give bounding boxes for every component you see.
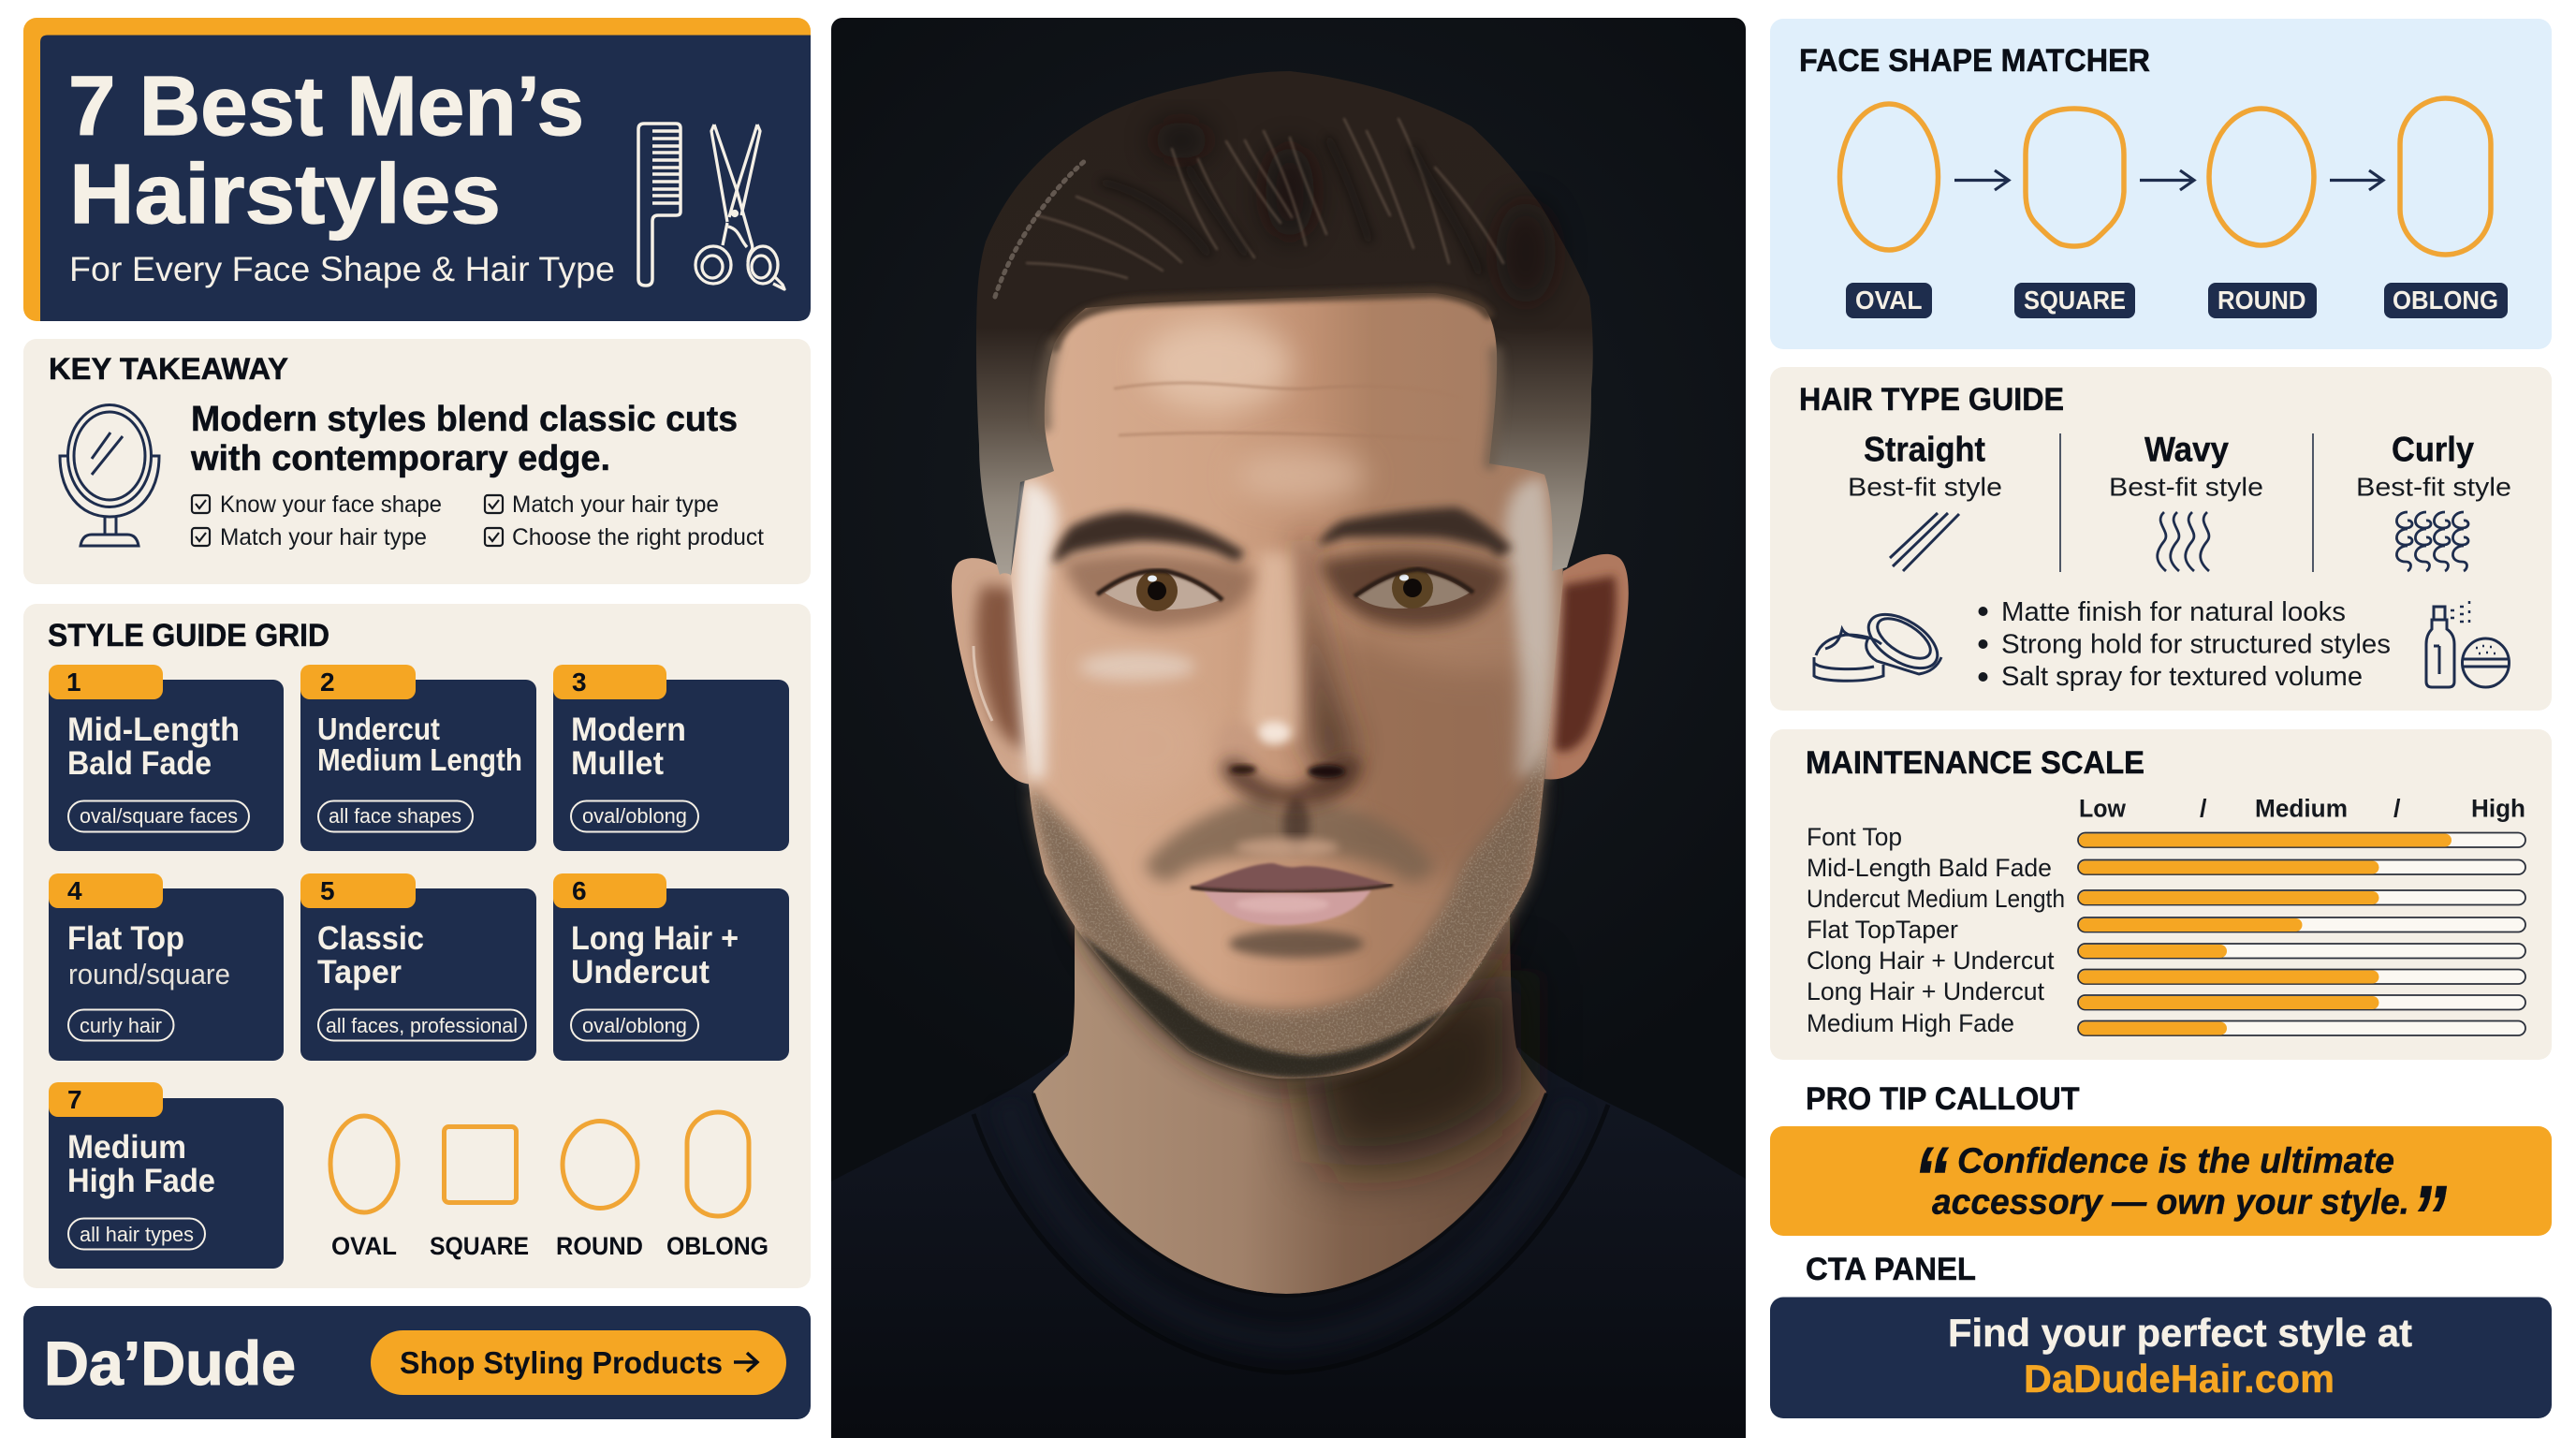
title — [68, 60, 584, 242]
panel: maintenance scale — [1770, 729, 2552, 1060]
checklist: Match your hair type — [220, 524, 427, 550]
style labels: Long Hair + Undercut — [1807, 977, 2044, 1005]
style labels: Font Top — [1807, 823, 1902, 851]
heading: hair type guide: HAIR TYPE GUIDE — [1799, 382, 2064, 418]
card 4 — [49, 873, 284, 1061]
scale labels — [2079, 794, 2525, 822]
key message: with contemporary edge. — [190, 439, 610, 478]
card 7 — [49, 1082, 284, 1269]
panel: title header — [23, 18, 811, 321]
icon: pomade jar — [1814, 604, 1946, 681]
icon: spray bottle and powder — [2426, 601, 2509, 687]
checklist: Choose the right product — [512, 524, 764, 550]
callout: pro tip quote: Confidence is the ultimate — [1957, 1142, 2394, 1181]
product tips list: Salt spray for textured volume — [2001, 662, 2363, 692]
arrows — [1954, 170, 2383, 190]
card 5: Classic — [317, 920, 424, 957]
shape labels: ROUND — [2217, 286, 2306, 315]
product tips list: Matte finish for natural looks — [2001, 597, 2346, 627]
product tips list — [1979, 597, 2391, 692]
hair shading and strands — [995, 119, 1556, 463]
scale labels: Low — [2079, 794, 2127, 822]
panel: hair type guide — [1770, 367, 2552, 711]
column: curly: Best-fit style — [2356, 472, 2511, 502]
column: wavy: Wavy — [2144, 431, 2229, 468]
column: wavy — [2109, 431, 2263, 571]
mouth — [1191, 838, 1393, 925]
card 4: Flat Top — [67, 920, 184, 957]
card 1: 1 — [66, 668, 81, 697]
card 3: Modern — [571, 712, 686, 748]
shape labels: SQUARE — [2024, 286, 2126, 315]
heading: maintenance scale: MAINTENANCE SCALE — [1806, 745, 2144, 781]
skin highlights and shadows — [1016, 320, 1555, 874]
card 1: Bald Fade — [67, 745, 212, 782]
card 4: curly hair — [80, 1014, 162, 1037]
style labels: Undercut Medium Length — [1807, 885, 2065, 913]
checklist: Know your face shape — [220, 492, 442, 518]
key message: Modern styles blend classic cuts — [191, 400, 738, 439]
heading: style guide grid: STYLE GUIDE GRID — [48, 618, 329, 653]
card 7: High Fade — [67, 1163, 215, 1199]
title: Hairstyles — [69, 148, 501, 242]
card 4: round/square — [68, 958, 230, 990]
scale labels: Medium — [2255, 794, 2348, 822]
face — [1011, 281, 1563, 1078]
nose — [1220, 757, 1362, 807]
photo: portrait of man — [831, 18, 1750, 1438]
column: curly — [2356, 431, 2511, 571]
callout: pro tip quote: “ — [1913, 1129, 1949, 1228]
scale labels: / — [2200, 794, 2207, 822]
ears — [952, 554, 1629, 785]
subtitle: For Every Face Shape & Hair Type — [69, 250, 615, 288]
panel: brand bar — [23, 1306, 811, 1419]
icon: mirror — [60, 404, 159, 546]
face shape outlines — [1840, 98, 2491, 255]
shape labels: OVAL — [1855, 286, 1923, 315]
panel: call to action — [1770, 1298, 2552, 1418]
callout: pro tip quote — [1770, 1126, 2552, 1267]
key message — [190, 400, 738, 478]
card 6: oval/oblong — [582, 1014, 687, 1037]
face shape icons: ROUND — [556, 1232, 643, 1260]
style labels: Clong Hair + Undercut — [1807, 946, 2055, 975]
card 7: all hair types — [80, 1223, 194, 1246]
style labels — [1807, 823, 2065, 1037]
hair — [976, 71, 1593, 575]
card 7: Medium — [67, 1129, 186, 1166]
card 6: Undercut — [571, 954, 710, 990]
card 6: Long Hair + — [571, 920, 739, 957]
card 5: all faces, professional — [326, 1014, 518, 1037]
eyebrows — [1052, 507, 1513, 564]
card 2: all face shapes — [329, 804, 461, 828]
column: wavy: Best-fit style — [2109, 472, 2263, 502]
shirt — [831, 1048, 1746, 1352]
card 1: Mid-Length — [67, 712, 240, 748]
column: straight — [1848, 431, 2002, 571]
column: curly: Curly — [2392, 431, 2474, 468]
heading: face shape matcher: FACE SHAPE MATCHER — [1799, 43, 2150, 79]
face shape icons: OBLONG — [666, 1232, 768, 1260]
neck — [1033, 899, 1546, 1296]
card 3 — [553, 665, 789, 851]
scale labels: High — [2471, 794, 2525, 822]
title: 7 Best Men’s — [68, 60, 584, 154]
icon: scissors — [695, 125, 784, 289]
button: shop styling products: Shop Styling Products — [400, 1345, 723, 1380]
card 2: Undercut — [317, 712, 440, 746]
card 3: Mullet — [571, 745, 664, 782]
card 3: 3 — [572, 668, 587, 697]
style labels: Mid-Length Bald Fade — [1807, 854, 2052, 882]
style labels: Flat TopTaper — [1807, 916, 1958, 944]
panel: call to action: Find your perfect style at — [1948, 1311, 2412, 1355]
heading: key takeaway: KEY TAKEAWAY — [49, 352, 288, 386]
scale labels: / — [2393, 794, 2401, 822]
panel: call to action: DaDudeHair.com — [2024, 1357, 2334, 1401]
column: straight: Straight — [1864, 431, 1985, 468]
face shape icons: OVAL — [331, 1232, 397, 1260]
shape labels — [1846, 283, 2508, 318]
face shape icons: SQUARE — [430, 1232, 529, 1260]
card 3: oval/oblong — [582, 804, 687, 828]
heading: cta panel: CTA PANEL — [1806, 1252, 1976, 1287]
icon: comb — [638, 124, 681, 286]
card 1: oval/square faces — [80, 804, 238, 828]
product tips list: Strong hold for structured styles — [2001, 629, 2391, 659]
card 4: 4 — [67, 876, 82, 905]
checklist: Match your hair type — [512, 492, 719, 518]
stubble — [1029, 749, 1544, 1078]
panel: style guide grid — [23, 604, 811, 1288]
card 1 — [49, 665, 284, 851]
button: shop styling products — [371, 1330, 786, 1395]
card 5: 5 — [320, 876, 335, 905]
heading: pro tip callout: PRO TIP CALLOUT — [1806, 1081, 2080, 1117]
column: straight: Best-fit style — [1848, 472, 2002, 502]
callout: pro tip quote: accessory — own your style. — [1932, 1183, 2409, 1223]
shape labels: OBLONG — [2393, 286, 2498, 315]
brand logo: Da’Dude — [44, 1328, 296, 1398]
card 6 — [553, 873, 789, 1061]
face shape icons — [330, 1112, 768, 1260]
card 2: 2 — [320, 668, 335, 697]
card 5: Taper — [317, 954, 402, 990]
card 2 — [300, 665, 536, 851]
panel: face shape matcher — [1770, 19, 2552, 349]
card 6: 6 — [572, 876, 587, 905]
callout: pro tip quote: ” — [2411, 1167, 2447, 1267]
checklist — [192, 492, 764, 550]
card 7: 7 — [67, 1085, 82, 1114]
bar chart: maintenance levels — [2078, 833, 2525, 1035]
eyes — [1097, 567, 1473, 611]
card 2: Medium Length — [317, 742, 522, 777]
card 5 — [300, 873, 536, 1061]
eye sockets — [1062, 552, 1507, 627]
panel: key takeaway — [23, 339, 811, 584]
style labels: Medium High Fade — [1807, 1009, 2014, 1037]
